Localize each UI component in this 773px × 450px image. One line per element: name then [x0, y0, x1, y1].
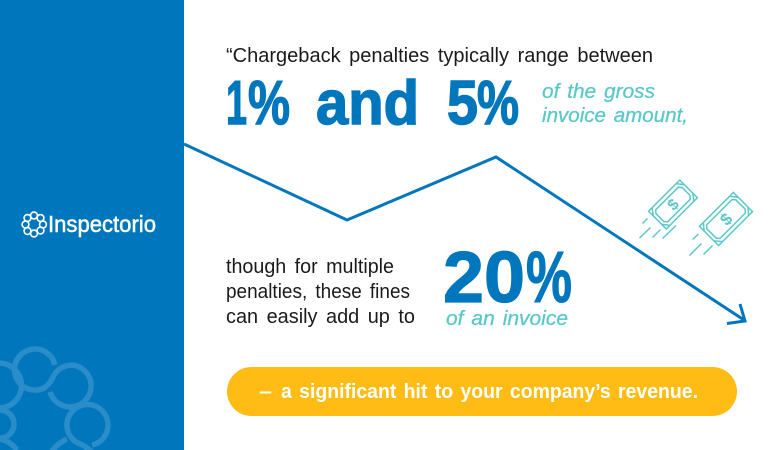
callout text: – [259, 381, 272, 403]
text: multiple penalties: though for multiple [226, 256, 394, 278]
text: of the gross invoice amount [542, 81, 688, 127]
text: multiple penalties [226, 256, 415, 328]
watermark: ring pattern [0, 349, 108, 450]
heading: 1% and 5%: % [248, 69, 290, 138]
heading: 1% and 5%: and [316, 69, 419, 138]
icon: flying money left: $ [665, 196, 683, 214]
heading: 1% and 5%: 1 [226, 69, 247, 138]
text: opening quote: “Chargeback penalties typically range between [226, 45, 653, 67]
arrow head [727, 304, 745, 324]
heading: 1% and 5%: % [477, 69, 519, 138]
text: multiple penalties: can easily add up to [226, 306, 415, 328]
heading: 1% and 5%: 5 [447, 69, 478, 138]
text: of the gross invoice amount: of the gross [542, 81, 655, 103]
wordmark: Inspectorio [48, 211, 156, 237]
icon: flying money right: $ [716, 209, 737, 229]
callout: yellow pill [227, 367, 737, 416]
text: multiple penalties: penalties, these fines [226, 281, 410, 303]
logo: Inspectorio [22, 211, 156, 237]
chart: declining arrow line [184, 144, 745, 324]
text: of an invoice: of an invoice [446, 308, 568, 330]
heading: 20%: % [526, 238, 572, 318]
callout text: a significant hit to your company’s revenue. [281, 381, 698, 403]
heading: 20%: 20 [443, 238, 525, 318]
icon: flying money right [690, 192, 753, 256]
icon: flying money left [640, 180, 697, 238]
icon: ring of circles [22, 212, 46, 237]
text: of the gross invoice amount: invoice amount, [542, 105, 688, 127]
panel: blue sidebar [0, 0, 184, 450]
heading: 20% [443, 238, 572, 318]
heading: 1% and 5% [226, 69, 519, 138]
